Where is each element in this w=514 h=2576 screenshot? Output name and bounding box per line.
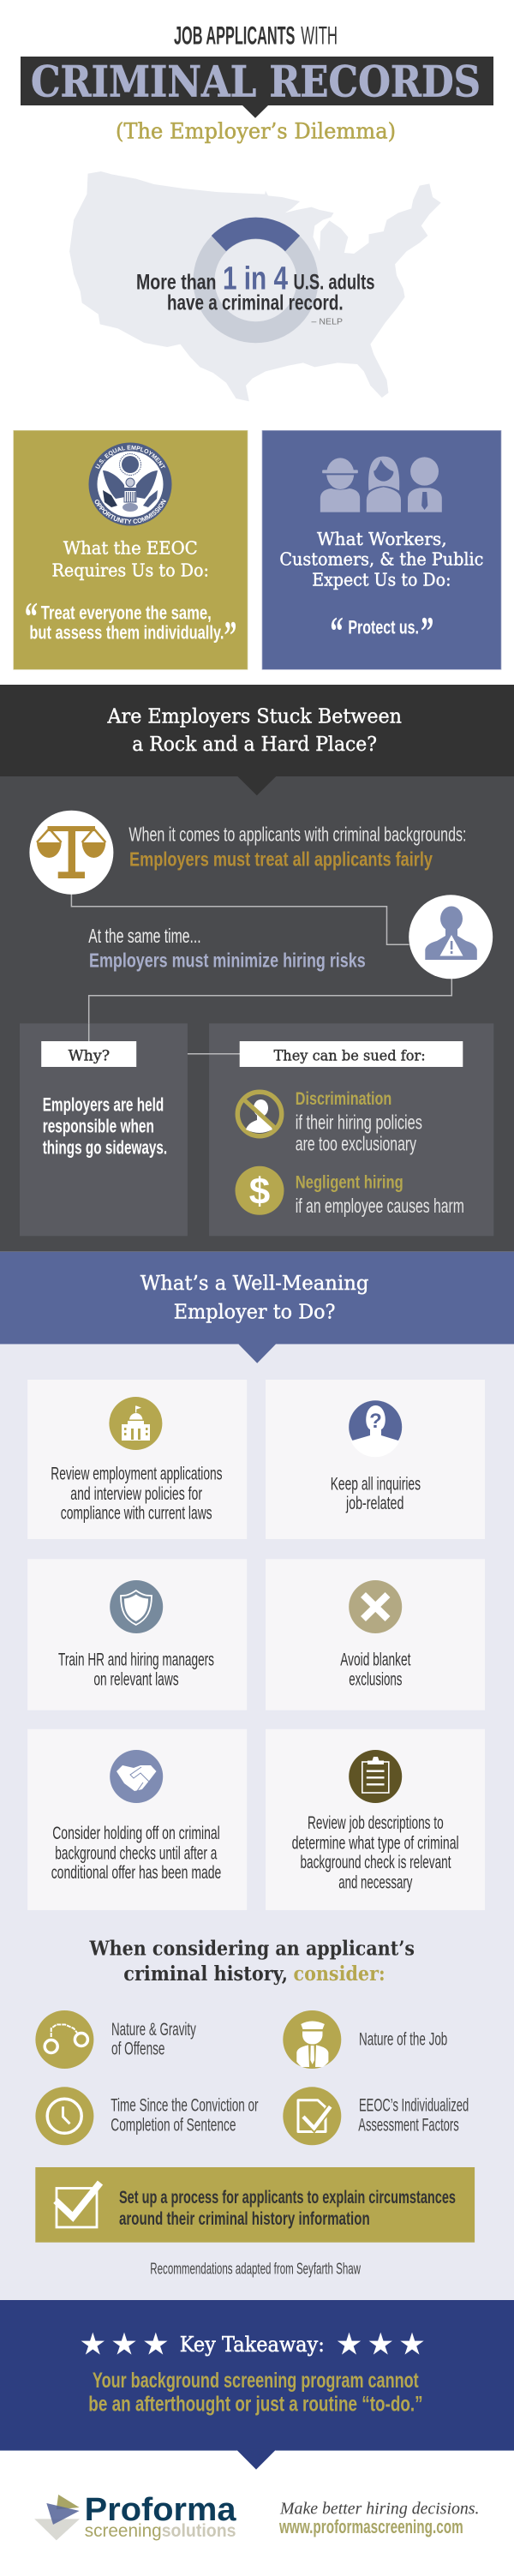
icon: EEOC seal — [89, 442, 171, 526]
callout text — [119, 2188, 456, 2229]
card text — [58, 1650, 214, 1690]
card text: Review employment applications — [51, 1465, 222, 1484]
icon: dollar — [235, 1166, 284, 1215]
quote — [25, 595, 236, 659]
discrimination text: are too exclusionary — [296, 1133, 416, 1155]
icon: scales of justice — [29, 811, 113, 895]
icon: dollar: $ — [249, 1171, 270, 1213]
heading: when considering: consider: — [293, 1962, 386, 1986]
panel: they can be sued for — [209, 1023, 493, 1236]
icons: left stars — [81, 2333, 168, 2355]
map of the United States — [69, 171, 441, 401]
quote: “ — [330, 609, 344, 655]
heading — [279, 529, 483, 590]
section heading: What’s a Well-Meaning — [140, 1273, 369, 1295]
heading: What Workers, — [317, 529, 447, 549]
title line: job applicants with: JOB APPLICANTS — [174, 22, 295, 51]
icon: clock — [35, 2087, 93, 2145]
explanation — [43, 1094, 167, 1159]
title banner — [21, 57, 493, 118]
card: avoid blanket exclusions — [266, 1559, 485, 1710]
heading — [51, 538, 209, 581]
card text: Keep all inquiries — [331, 1474, 421, 1494]
section heading — [140, 1273, 369, 1323]
card text: background checks until after a — [55, 1843, 218, 1863]
callout: set up a process — [35, 2167, 475, 2243]
card text: compliance with current laws — [61, 1504, 212, 1524]
icon: clipboard — [349, 1750, 402, 1803]
why text: Why? — [69, 1047, 110, 1063]
donut chart: base ring — [204, 229, 308, 332]
panel: what workers, customers and the public expect — [262, 430, 501, 669]
quote: ” — [224, 614, 236, 659]
section background — [0, 776, 514, 1252]
quote — [330, 609, 433, 655]
factor text: Completion of Sentence — [111, 2116, 236, 2136]
logo wordmark: Proforma — [85, 2492, 236, 2528]
explanation: responsible when — [43, 1116, 154, 1137]
statistic text: U.S. adults — [293, 270, 375, 294]
discrimination text: Discrimination — [296, 1089, 391, 1109]
negligent hiring text — [296, 1173, 464, 1217]
explanation: things go sideways. — [43, 1137, 167, 1159]
statistic text: More than — [136, 270, 216, 294]
text: minimize risks: At the same time... — [88, 925, 201, 947]
section header banner — [0, 685, 514, 795]
icon: three people — [320, 457, 442, 512]
quote: but assess them individually. — [29, 622, 224, 644]
factor text: Nature of the Job — [359, 2030, 447, 2050]
card text: job-related — [345, 1494, 403, 1513]
discrimination text — [296, 1089, 422, 1155]
card: keep inquiries job-related — [266, 1380, 485, 1539]
quote: “ — [25, 595, 38, 640]
card text — [340, 1650, 411, 1690]
card text — [331, 1474, 421, 1513]
card text: Review job descriptions to — [308, 1813, 444, 1833]
connector over panel — [209, 1053, 240, 1055]
card text: exclusions — [349, 1670, 403, 1690]
icon: EEOC seal: OPPORTUNITY COMMISSION — [94, 499, 166, 524]
US map with donut statistic — [69, 171, 441, 401]
connector lines — [71, 894, 451, 1054]
section heading: Are Employers Stuck Between — [107, 705, 402, 728]
subtitle: (The Employer’s Dilemma) — [116, 118, 396, 143]
factor text — [111, 2095, 259, 2136]
sued label — [240, 1041, 463, 1067]
section: rock and a hard place — [0, 685, 514, 1252]
icon: X — [349, 1580, 402, 1633]
icon: person with warning — [409, 895, 493, 979]
factor: time since conviction — [35, 2087, 259, 2145]
statistic text: – NELP — [312, 316, 343, 326]
header title block — [21, 22, 493, 143]
factor: nature and gravity — [35, 2010, 196, 2069]
source note: Recommendations adapted from Seyfarth Shaw — [150, 2260, 362, 2277]
card: review applications — [27, 1380, 247, 1539]
statistic text — [136, 261, 375, 326]
section: what to do — [0, 1252, 514, 2300]
footer — [34, 2492, 480, 2541]
card: review job descriptions — [266, 1729, 485, 1910]
section heading: a Rock and a Hard Place? — [132, 734, 377, 756]
donut chart: one quarter segment — [212, 218, 300, 251]
icon: government building — [109, 1397, 162, 1450]
statistic text: 1 in 4 — [223, 261, 288, 297]
heading: Expect Us to Do: — [312, 569, 451, 590]
card: hold off on checks — [27, 1729, 247, 1910]
card text — [51, 1824, 221, 1883]
logo wordmark: solutions — [162, 2521, 236, 2541]
icons: right stars — [338, 2333, 424, 2355]
discrimination text: if their hiring policies — [296, 1111, 422, 1133]
icon: checkbox — [56, 2183, 100, 2227]
icon: officer — [283, 2010, 341, 2069]
icon: handcuffs — [35, 2010, 93, 2069]
factor text: of Offense — [111, 2040, 164, 2059]
panel: what the EEOC requires — [13, 430, 248, 670]
why label — [41, 1041, 136, 1067]
statistic text: have a criminal record. — [167, 291, 344, 315]
heading: What the EEOC — [63, 538, 198, 559]
quote: Protect us. — [348, 616, 419, 638]
tagline: Make better hiring decisions. — [279, 2499, 480, 2518]
factor text — [358, 2095, 469, 2136]
section header banner — [0, 1252, 514, 1363]
icon: document with check — [283, 2087, 341, 2145]
card text: Consider holding off on criminal — [52, 1824, 220, 1843]
logo mark — [34, 2495, 80, 2540]
icon: no person — [237, 1092, 282, 1136]
heading: when considering — [89, 1938, 415, 1986]
sued text: They can be sued for: — [274, 1047, 426, 1063]
text: minimize risks — [88, 925, 366, 971]
section background — [0, 1344, 514, 2300]
takeaway heading: Key Takeaway: — [180, 2333, 325, 2357]
takeaway banner — [0, 2300, 514, 2470]
card text: and interview policies for — [70, 1484, 202, 1504]
heading: Customers, & the Public — [279, 549, 483, 570]
section heading: Employer to Do? — [174, 1301, 336, 1323]
logo wordmark: screening — [85, 2521, 162, 2541]
factor text: Nature & Gravity — [111, 2020, 196, 2040]
icon: head with question mark: ? — [369, 1410, 382, 1433]
heading: when considering: criminal history, — [123, 1962, 288, 1986]
factor: nature of the job — [283, 2010, 447, 2069]
icon: head with question mark — [349, 1400, 402, 1457]
icon: shield — [110, 1580, 163, 1633]
section: key takeaway — [0, 2300, 514, 2470]
card text — [292, 1813, 459, 1892]
icon: EEOC seal: U.S. EQUAL EMPLOYMENT — [95, 446, 165, 469]
card text: on relevant laws — [93, 1670, 179, 1690]
factor: EEOC assessment factors — [283, 2087, 469, 2145]
heading: Requires Us to Do: — [51, 560, 209, 581]
card text: and necessary — [338, 1872, 413, 1892]
panel: why — [20, 1023, 188, 1236]
takeaway text — [88, 2369, 423, 2416]
card: train HR — [27, 1559, 247, 1710]
text: treat fairly: Employers must treat all applicants fairly — [129, 848, 433, 871]
factor text: Time Since the Conviction or — [111, 2095, 259, 2115]
icon: handshake — [110, 1750, 163, 1803]
section heading — [107, 705, 402, 756]
factor text — [111, 2020, 196, 2059]
text: minimize risks: Employers must minimize hiring risks — [89, 949, 366, 971]
negligent hiring text: Negligent hiring — [296, 1173, 403, 1193]
title word: with: WITH — [301, 22, 338, 51]
quote: ” — [421, 609, 433, 655]
heading: when considering: When considering an applicant’s — [89, 1938, 415, 1961]
connector stub over panel — [88, 1023, 90, 1041]
card text — [51, 1465, 222, 1524]
card text: conditional offer has been made — [51, 1863, 221, 1883]
card text: Avoid blanket — [340, 1650, 411, 1669]
card text: Train HR and hiring managers — [58, 1650, 214, 1669]
explanation: Employers are held — [43, 1094, 164, 1116]
callout text: around their criminal history information — [119, 2209, 370, 2229]
quote: Treat everyone the same, — [41, 602, 212, 624]
text: treat fairly — [128, 824, 466, 871]
